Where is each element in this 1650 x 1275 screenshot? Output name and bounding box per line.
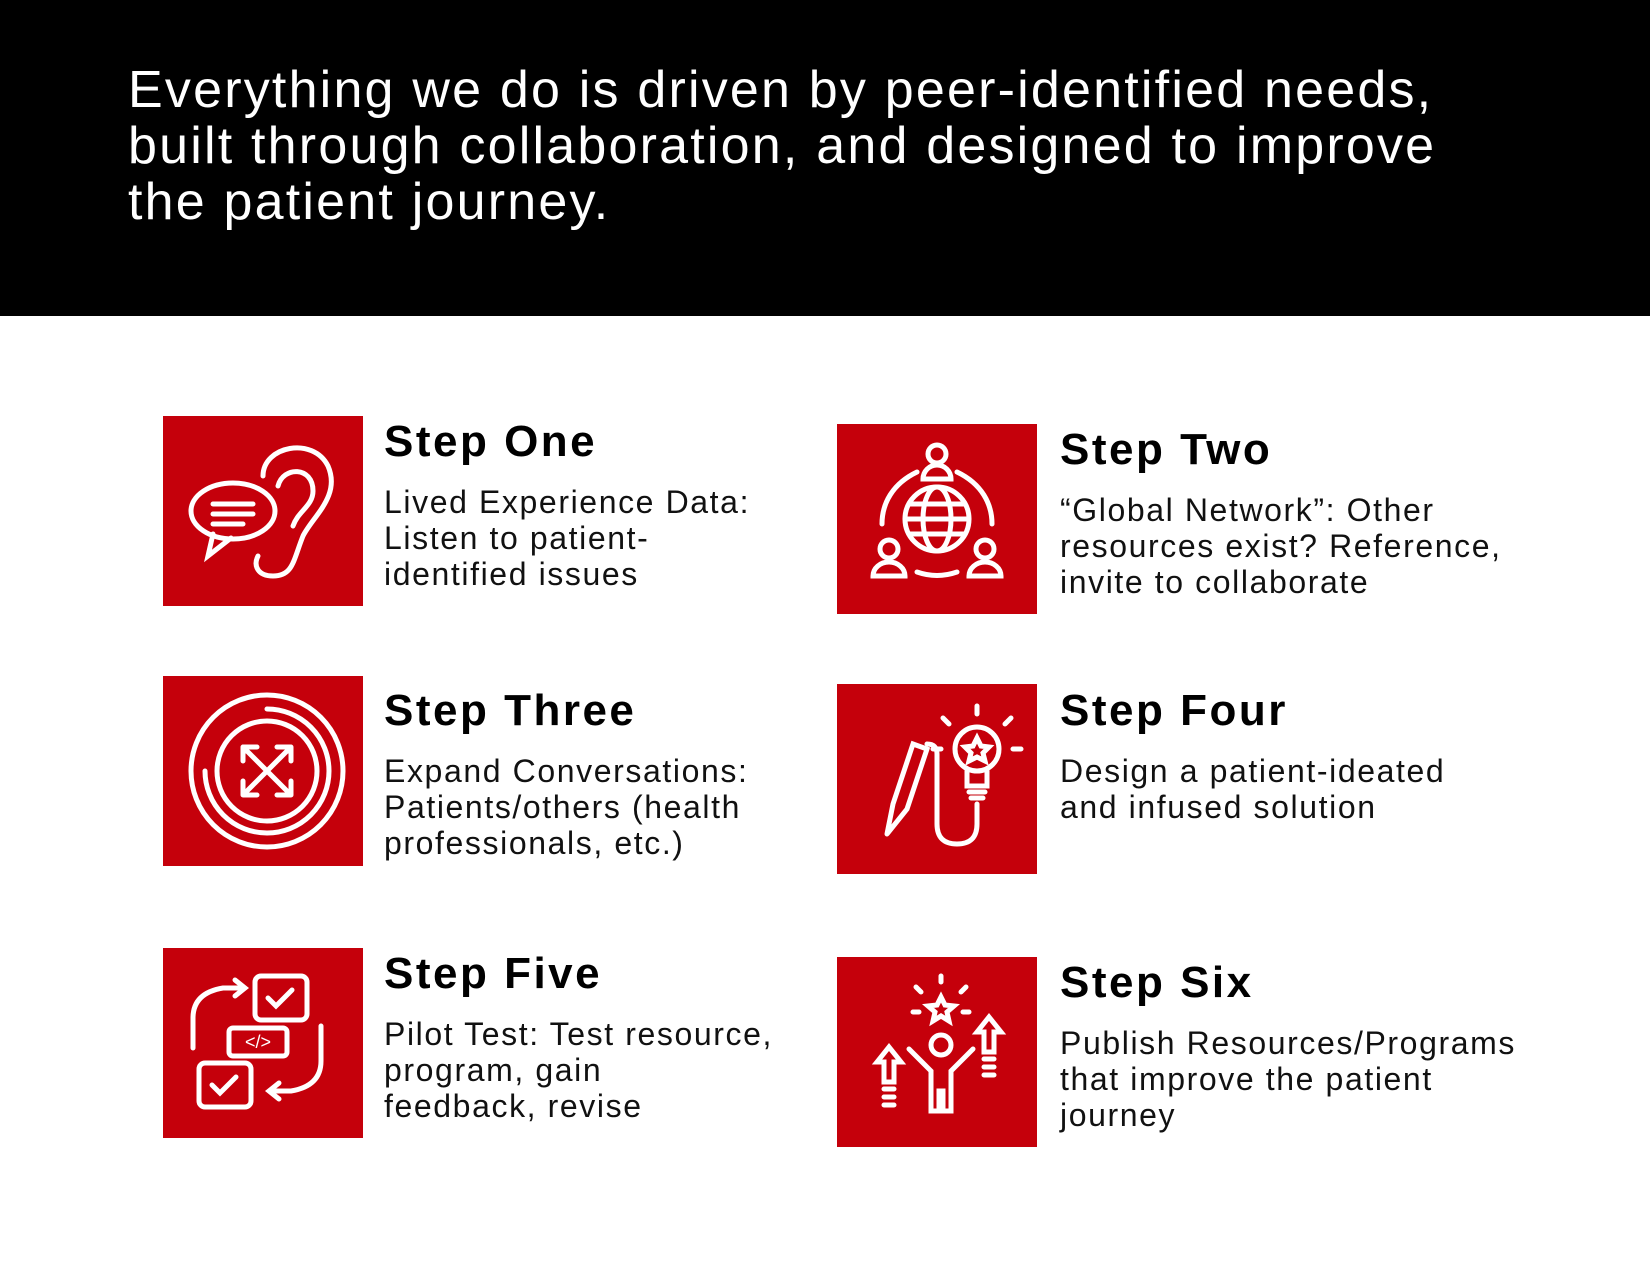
- icon: ear with speech bubble: [163, 416, 363, 606]
- step three text: professionals, etc.): [384, 825, 685, 861]
- header banner: Everything we do is driven by peer-identified needs,: [128, 61, 1433, 119]
- header banner: the patient journey.: [128, 173, 610, 231]
- step two text: [1060, 425, 1502, 600]
- step five text: [384, 949, 773, 1124]
- step two text: “Global Network”: Other: [1060, 492, 1435, 528]
- step one text: Listen to patient-: [384, 520, 649, 556]
- step six text: [1059, 958, 1516, 1133]
- header banner: [0, 0, 1650, 316]
- step four text: Design a patient-ideated: [1060, 753, 1445, 789]
- icon: pencil and lightbulb: [837, 684, 1037, 874]
- step five text: program, gain: [384, 1052, 602, 1088]
- step five text: Pilot Test: Test resource,: [384, 1016, 773, 1052]
- step two text: invite to collaborate: [1060, 564, 1369, 600]
- icon: iterate/test cycle: [163, 948, 363, 1138]
- step six text: Publish Resources/Programs: [1060, 1025, 1516, 1061]
- step five text: Step Five: [384, 949, 602, 998]
- icon: iterate/test cycle: </>: [245, 1032, 271, 1052]
- step three text: [384, 686, 748, 861]
- step three text: Patients/others (health: [384, 789, 741, 825]
- step one text: [384, 417, 750, 592]
- icon: global network: [837, 424, 1037, 614]
- step one text: identified issues: [384, 556, 639, 592]
- step two text: Step Two: [1060, 425, 1272, 474]
- step six text: journey: [1060, 1097, 1176, 1133]
- header banner: built through collaboration, and designed to improve: [128, 117, 1436, 175]
- step four text: Step Four: [1060, 686, 1288, 735]
- step three text: Expand Conversations:: [384, 753, 748, 789]
- step one text: Lived Experience Data:: [384, 484, 750, 520]
- step five text: feedback, revise: [384, 1088, 643, 1124]
- step three text: Step Three: [384, 686, 636, 735]
- step six text: that improve the patient: [1060, 1061, 1433, 1097]
- step four text: and infused solution: [1060, 789, 1377, 825]
- step four text: [1060, 686, 1445, 825]
- step one text: Step One: [384, 417, 597, 466]
- icon: expanding circle: [163, 676, 363, 866]
- step two text: resources exist? Reference,: [1060, 528, 1502, 564]
- step six text: Step Six: [1060, 958, 1254, 1007]
- icon: person with rising arrows: [837, 957, 1037, 1147]
